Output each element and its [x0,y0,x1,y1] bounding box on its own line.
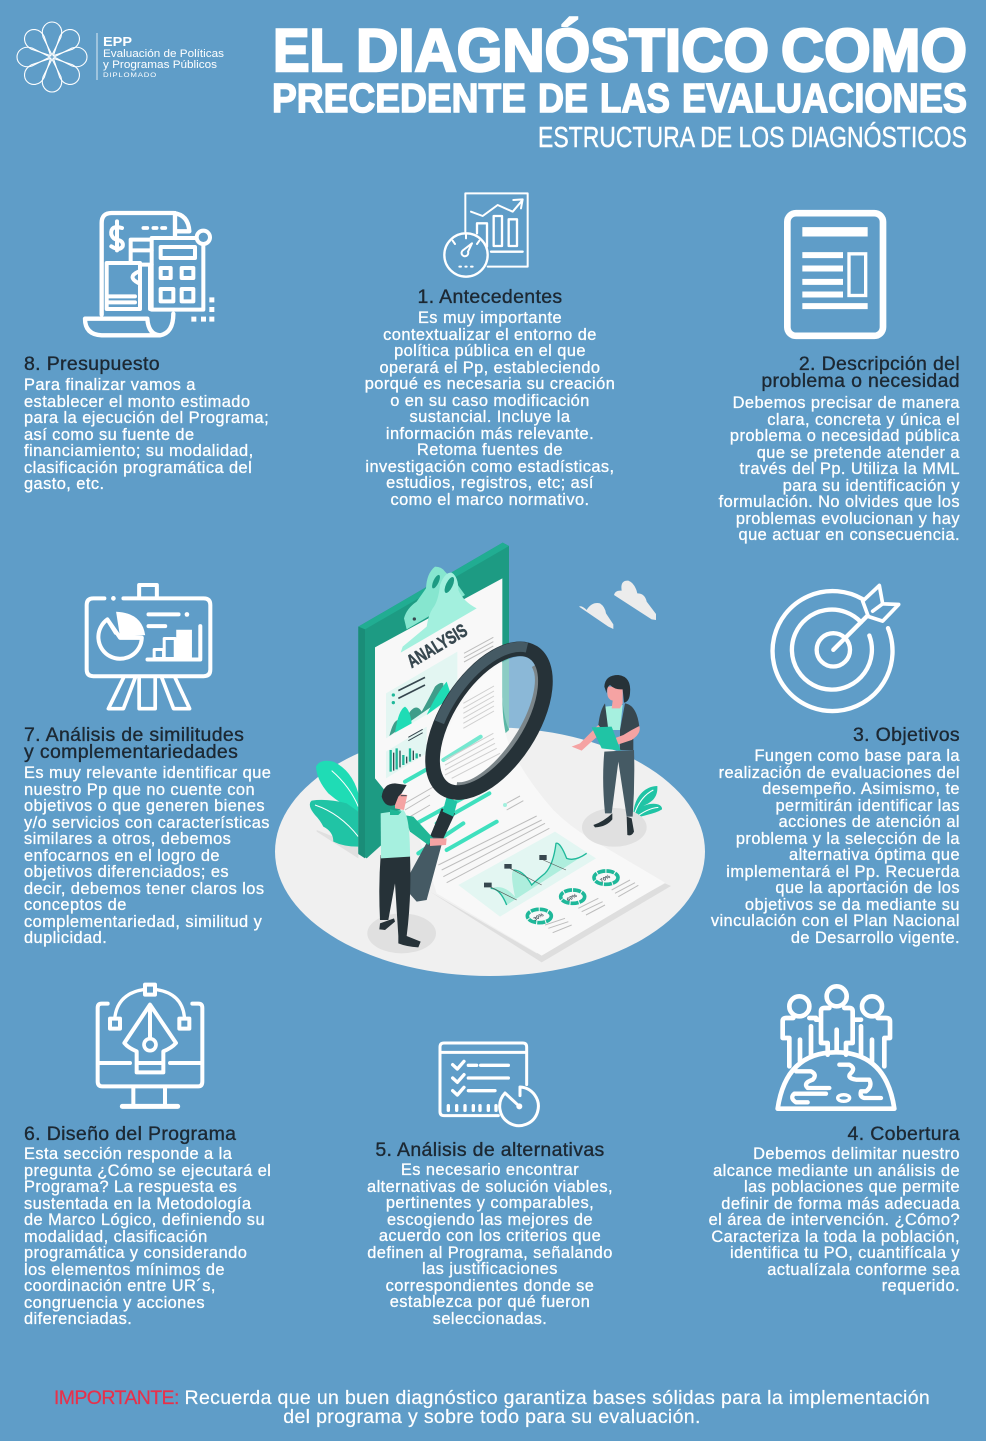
text block: información más relevante. [386,424,594,442]
text block: implementará el Pp. Recuerda [726,862,960,880]
logo text: y Programas Públicos [103,59,218,71]
heading: 3. Objetivos [853,724,960,746]
panel: 3 objetivos [710,584,960,947]
text block: política pública en el que [394,342,586,360]
text block: Debemos delimitar nuestro [753,1145,960,1163]
magnifier handle [409,797,457,902]
man [367,783,447,953]
text block: formulación. No olvides que los [719,493,960,511]
text block: actualízala conforme sea [767,1260,960,1278]
text block: alternativas de solución viables, [367,1178,613,1196]
title [272,16,967,154]
text block: Esta sección responde a la [24,1145,232,1163]
text block: de Desarrollo vigente. [791,928,960,946]
text block: Programa? La respuesta es [24,1178,237,1196]
text block: pertinentes y comparables, [386,1194,594,1212]
panel: 8 presupuesto [24,210,269,493]
clipboard board [358,543,509,858]
callout: importante: IMPORTANTE: Recuerda que un buen diagnóstico garantiza bases sólidas para la implementación [54,1387,930,1409]
text block: Debemos precisar de manera [733,394,960,412]
paper [375,578,671,962]
text block: objetivos se da mediante su [745,896,960,914]
logo text [103,34,225,79]
icon: checklist with gauge [438,1042,540,1128]
text block: duplicidad. [24,929,107,947]
text block: o en su caso modificación [390,392,590,410]
donut labels: 70% [599,874,612,884]
text block: de Marco Lógico, definiendo su [24,1211,265,1229]
text block: el área de intervención. ¿Cómo? [709,1211,960,1229]
text block: Para finalizar vamos a [24,376,196,394]
text block: objetivos o que generen bienes [24,797,265,815]
logo text: Evaluación de Políticas [103,48,225,60]
icon: budget calculator and bill [82,210,214,338]
heading: 6. Diseño del Programa [24,1123,236,1145]
icon: pen tool on monitor [96,982,204,1109]
text block: realización de evaluaciones del [719,764,960,782]
text block: permitirán identificar las [775,796,960,814]
text block: establezca por qué fueron [390,1293,590,1311]
text block: coordinación entre UR´s, [24,1277,216,1295]
text block: pregunta ¿Cómo se ejecutará el [24,1162,271,1180]
text block [709,1145,960,1295]
title: LAS [600,75,670,121]
text block: estudios, registros, etc; así [386,474,594,492]
heading: 8. Presupuesto [24,353,160,375]
illustration: analysis clipboard scene [275,542,705,976]
text block: problemas evolucionan y hay [736,510,960,528]
text block: través del Pp. Utiliza la MML [740,460,960,478]
text block [24,764,271,947]
text block: objetivos diferenciados; es [24,863,229,881]
text block: Es muy importante [418,309,562,327]
analysis label: ANALYSIS [403,619,471,672]
logo text: DIPLOMADO [103,73,157,79]
title: EL [273,17,343,84]
clip [401,567,477,653]
icon: chart and gauge [443,192,529,278]
text block: que se pretende atender a [757,444,960,462]
panel: 1 antecedentes [365,192,615,508]
heading [24,724,244,762]
heading: 2. Descripción del [799,353,960,375]
text block: Fungen como base para la [754,747,960,765]
heading: 1. Antecedentes [418,286,562,308]
text block: modalidad, clasificación [24,1228,208,1246]
text block: las poblaciones que permite [744,1178,960,1196]
text block: establecer el monto estimado [24,392,250,410]
text block: acuerdo con los criterios que [379,1227,601,1245]
text block: definen al Programa, señalando [367,1244,613,1262]
text block: vinculación con el Plan Nacional [711,912,960,930]
text block: programática y considerando [24,1244,247,1262]
text block: requerido. [882,1277,960,1295]
title: PRECEDENTE [272,75,526,121]
text block: identifica tu PO, cuantifícala y [730,1244,960,1262]
panel: 7 analisis de similitudes [24,583,271,947]
text block: contextualizar el entorno de [383,326,597,344]
text block: nuestro Pp que no cuente con [24,780,255,798]
text block: para la ejecución del Programa; [24,409,269,427]
text block: para su identificación y [783,476,960,494]
text block: problema o necesidad pública [730,427,960,445]
text block: problema y la selección de la [736,830,960,848]
title: DIAGNÓSTICO [356,17,769,84]
logo text: EPP [103,34,132,49]
text block: diferenciadas. [24,1310,132,1328]
heading [761,353,960,392]
text block: y/o servicios con características [24,814,270,832]
text block: los elementos mínimos de [24,1260,225,1278]
text block: sustancial. Incluye la [410,408,570,426]
logo: EPP diplomado [16,22,225,92]
panel: 6 diseno del programa [24,982,271,1328]
text block: porqué es necesaria su creación [365,375,615,393]
text block [365,309,615,508]
heading: 7. Análisis de similitudes [24,724,244,746]
donut labels [533,874,612,923]
plant right [633,786,662,820]
text block: clasificación programática del [24,458,252,476]
icon: target with arrow [770,584,900,714]
text block: investigación como estadísticas, [365,458,615,476]
magnifier [407,627,571,814]
text block: que la aportación de los [775,879,960,897]
text block [718,394,960,544]
donut gauges [527,871,618,923]
text block: complementariedad, similitud y [24,912,262,930]
text block: Retoma fuentes de [417,441,563,459]
text block: congruencia y acciones [24,1294,205,1312]
text block: alcance mediante un análisis de [713,1162,960,1180]
text block: acciones de atención al [779,813,960,831]
clouds [579,581,656,629]
text block: que actuar en consecuencia. [739,526,960,544]
text block: clara, concreta y única el [767,410,960,428]
text block: definir de forma más adecuada [721,1194,960,1212]
text block: financiamiento; su modalidad, [24,442,254,460]
text block: similares a otros, debemos [24,830,231,848]
heading: 5. Análisis de alternativas [375,1139,605,1161]
lower chart [458,832,596,917]
text block: seleccionadas. [433,1310,547,1328]
icon: document [784,210,886,340]
heading: 4. Cobertura [848,1123,960,1145]
area chart [386,652,457,738]
text block: Es necesario encontrar [401,1161,579,1179]
text block [367,1161,613,1328]
text block [24,1145,271,1328]
panel: 4 cobertura [709,984,960,1295]
bar chart [386,727,427,778]
text block: así como su fuente de [24,426,195,444]
donut labels: 60% [566,893,579,903]
text block: gasto, etc. [24,475,104,493]
text block: decir, debemos tener claros los [24,880,264,898]
callout: importante [54,1387,930,1428]
text block: Es muy relevante identificar que [24,764,271,782]
callout: importante: del programa y sobre todo para su evaluación. [283,1406,701,1428]
text block: correspondientes donde se [386,1276,594,1294]
gray text lines [405,637,638,933]
icon: people on globe [775,984,897,1111]
text block: alternativa óptima que [789,846,960,864]
panel: 5 analisis de alternativas [367,1042,613,1328]
donut labels: 30% [533,912,545,923]
text block: Caracteriza la toda la población, [711,1228,960,1246]
woman [572,675,647,847]
text block: operará el Pp, estableciendo [380,358,600,376]
plant left [310,761,358,858]
text block: sustentada en la Metodología [24,1194,251,1212]
text block: las justificaciones [422,1260,558,1278]
text block: enfocarnos en el logro de [24,846,220,864]
panel: 2 descripcion del problema [718,210,960,544]
text block: como el marco normativo. [390,490,590,508]
title: DE [538,75,588,121]
heading: problema o necesidad [761,370,960,392]
icon: flower mark [17,22,87,92]
heading: y complementariedades [24,740,238,762]
text block [710,747,960,947]
platform [275,727,705,976]
text block: escogiendo las mejores de [387,1210,593,1228]
text block: desempeño. Asimismo, te [762,780,960,798]
icon: presentation board [84,583,212,710]
teal text bars [405,737,497,853]
text block [24,376,269,493]
title: COMO [781,17,967,84]
text block: conceptos de [24,896,127,914]
